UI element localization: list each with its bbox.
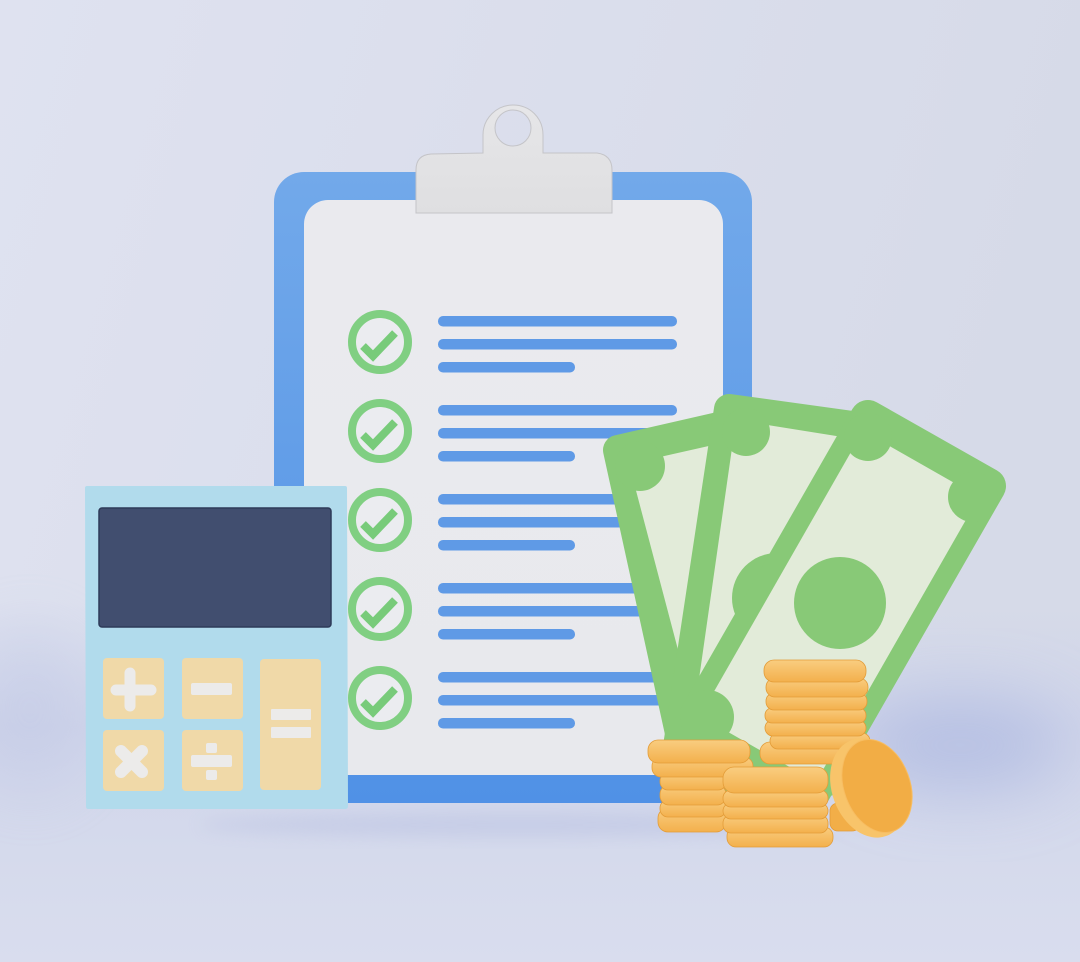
minus key [182, 658, 243, 719]
clipboard [274, 105, 752, 803]
checklist row 5 [352, 670, 677, 728]
checklist row 2 [352, 403, 677, 462]
standing coin [817, 727, 924, 849]
plus key [103, 658, 164, 719]
calculator body [85, 486, 348, 809]
banknotes [615, 408, 998, 797]
multiply key [103, 730, 164, 791]
calculator screen [99, 508, 331, 627]
coin stack left [648, 740, 753, 832]
checklist row 1 [352, 314, 677, 372]
divide key [182, 730, 243, 791]
coins [648, 660, 924, 849]
banknote left [615, 416, 860, 797]
checklist row 3 [352, 492, 677, 550]
calculator [85, 486, 348, 809]
metal clip [416, 105, 612, 213]
coin stack front [723, 767, 833, 847]
checklist row 4 [352, 581, 677, 640]
equals key [260, 659, 321, 790]
clipboard board [274, 172, 752, 803]
banknote right [680, 413, 998, 793]
banknote middle [676, 408, 881, 781]
coin stack back [760, 660, 870, 831]
paper sheet [304, 200, 723, 775]
